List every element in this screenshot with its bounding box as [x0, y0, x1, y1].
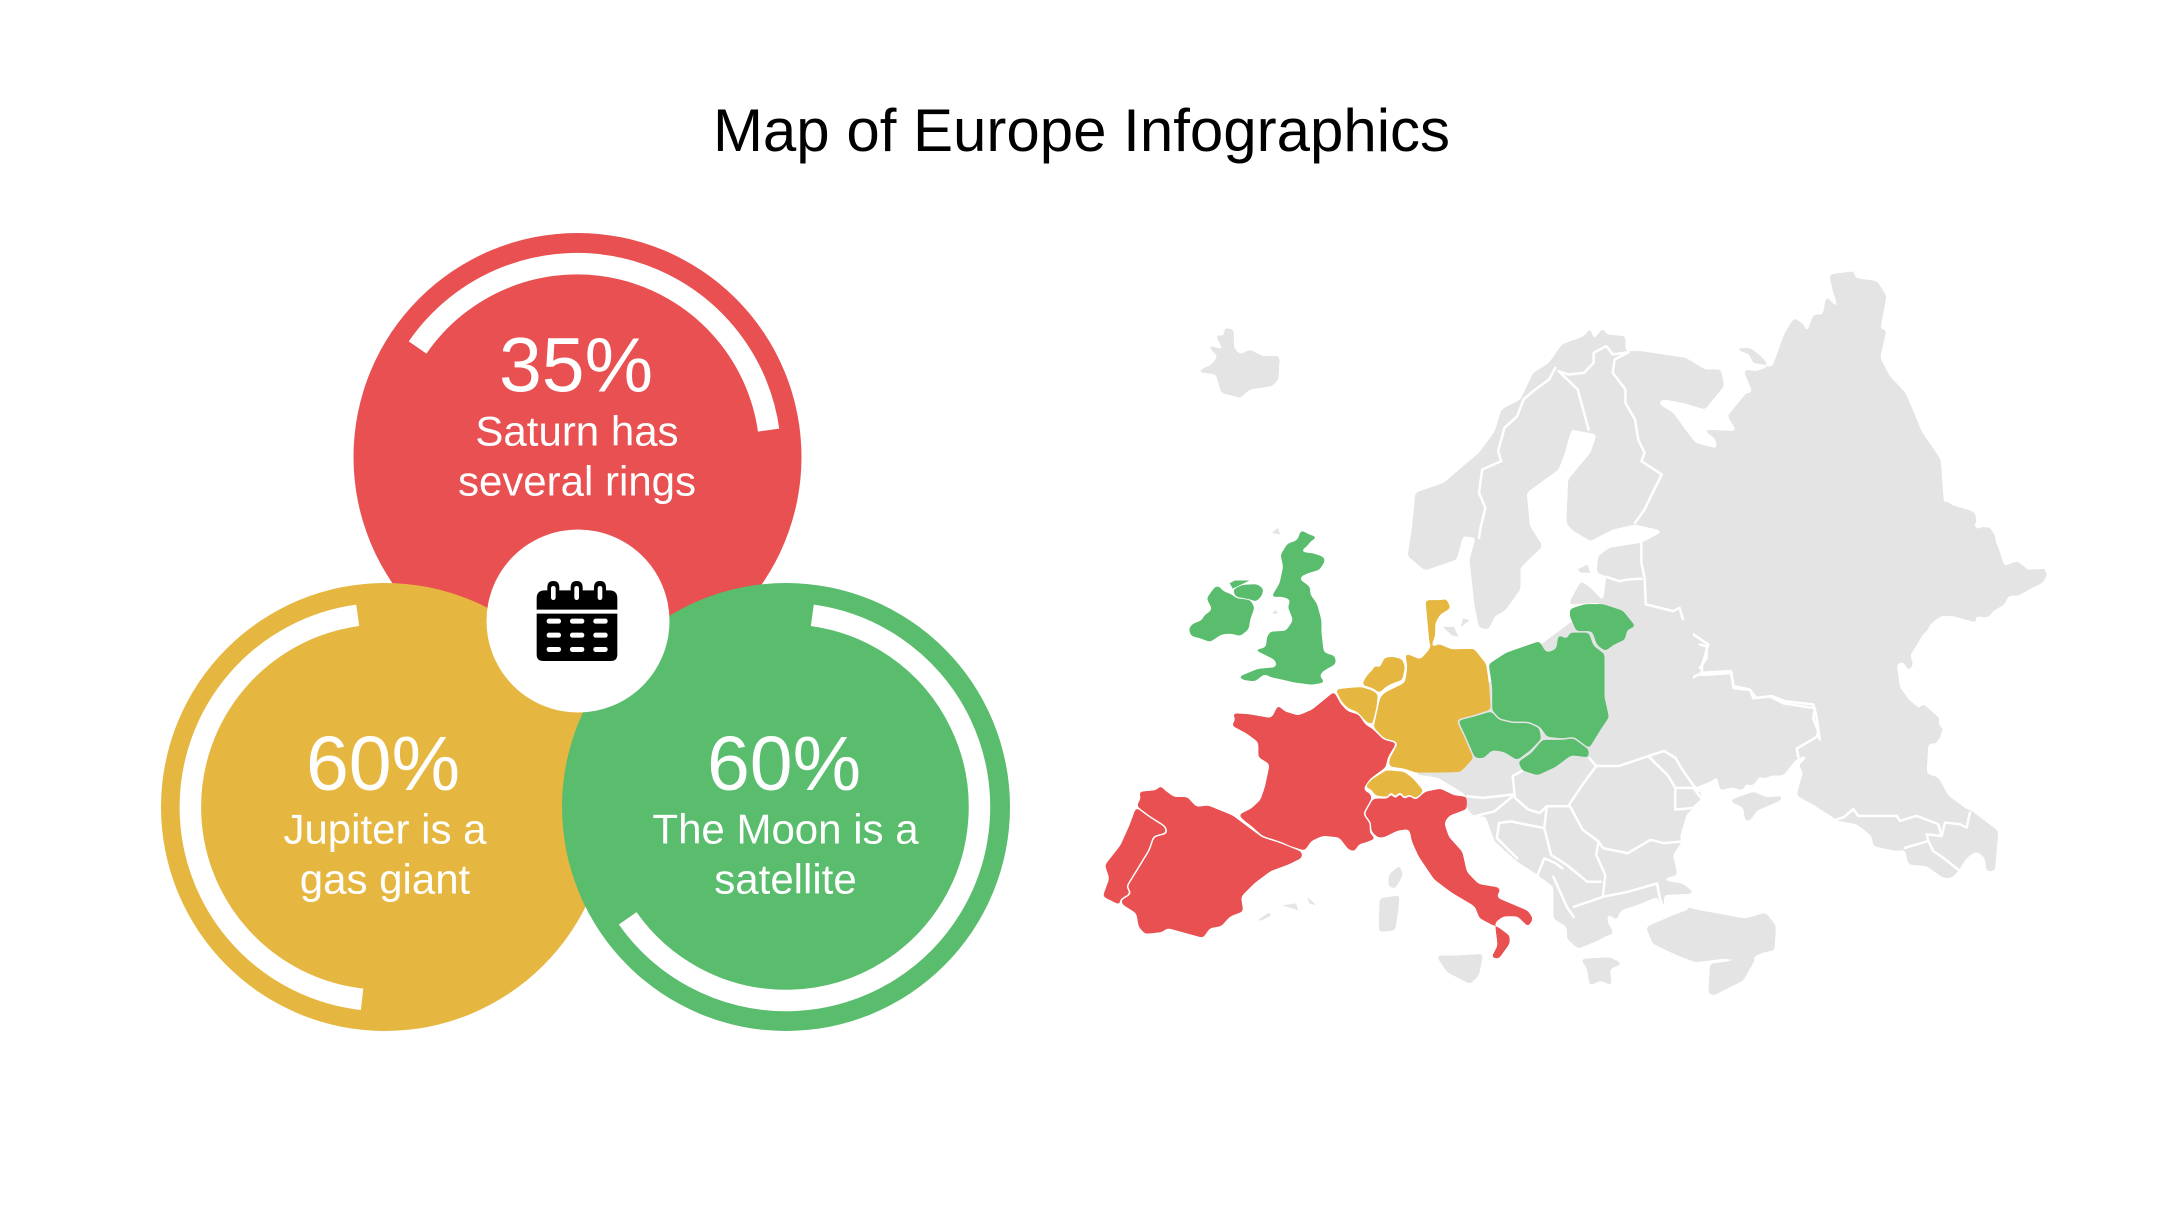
panel: Saturn 35%: several rings	[458, 458, 696, 504]
panel: Moon 60%: satellite	[714, 856, 857, 902]
Sardinia	[1379, 895, 1400, 932]
green: Great Britain	[1236, 529, 1337, 686]
Anatolia	[1646, 909, 1776, 962]
panel: Moon 60%	[562, 583, 1010, 1031]
green: Northern Ireland	[1232, 583, 1264, 603]
panel: Moon 60%: The Moon is a	[652, 806, 919, 852]
Sicily	[1436, 954, 1483, 984]
panel: Jupiter 60%: 60%	[306, 721, 460, 807]
title: Map of Europe Infographics	[713, 97, 1450, 164]
map: southern region and coloured countries	[1102, 528, 1776, 986]
Levant	[1708, 957, 1757, 996]
panel: Jupiter 60%: gas giant	[300, 856, 471, 902]
Scandinavia and Russia	[1408, 271, 2048, 739]
green: Czech Republic	[1457, 711, 1542, 761]
Turkey east	[1687, 907, 1772, 959]
green: Slovakia	[1517, 738, 1589, 776]
northern borders	[1479, 346, 1820, 739]
Crimea	[1728, 792, 1785, 821]
yellow: Germany	[1373, 597, 1491, 773]
small Scottish islands	[1272, 528, 1280, 614]
map: northern grey land	[1196, 271, 2048, 739]
red: Italy	[1364, 788, 1534, 960]
red: France	[1231, 691, 1398, 853]
Peloponnese	[1580, 957, 1623, 986]
yellow: Switzerland	[1364, 769, 1425, 800]
Southern Russia and Caucasus	[1687, 500, 2048, 878]
Iceland	[1196, 328, 1280, 398]
center white circle with calendar	[486, 530, 670, 712]
yellow: Netherlands	[1361, 656, 1406, 694]
Balearic islands	[1258, 897, 1316, 920]
grey central and Balkan land	[1416, 620, 1702, 949]
red: Portugal	[1102, 806, 1167, 907]
icon: calendar	[537, 581, 617, 661]
green: Lithuania	[1569, 603, 1637, 652]
Danish islands	[1443, 618, 1470, 637]
map: eastern borders	[1700, 644, 1970, 870]
yellow: Belgium	[1334, 686, 1379, 726]
red: Spain	[1120, 784, 1303, 939]
panel: Saturn 35%: Saturn has	[475, 408, 679, 454]
map of Europe	[1102, 271, 2048, 996]
panel: Saturn 35%	[354, 233, 802, 681]
Corsica	[1389, 865, 1403, 888]
venn diagram: three percentage circles	[161, 233, 1010, 1031]
green: Donegal	[1230, 581, 1249, 589]
green: Ireland	[1188, 585, 1255, 643]
panel: Jupiter 60%: Jupiter is a	[283, 806, 487, 852]
green: Poland	[1488, 632, 1610, 749]
panel: Saturn 35%: 35%	[499, 322, 653, 408]
map: south-eastern grey land	[1687, 500, 2048, 996]
panel: Jupiter 60%	[161, 583, 609, 1031]
Baltic island	[1578, 564, 1590, 573]
Balkan borders	[1468, 751, 1702, 917]
panel: Moon 60%: 60%	[707, 721, 861, 807]
